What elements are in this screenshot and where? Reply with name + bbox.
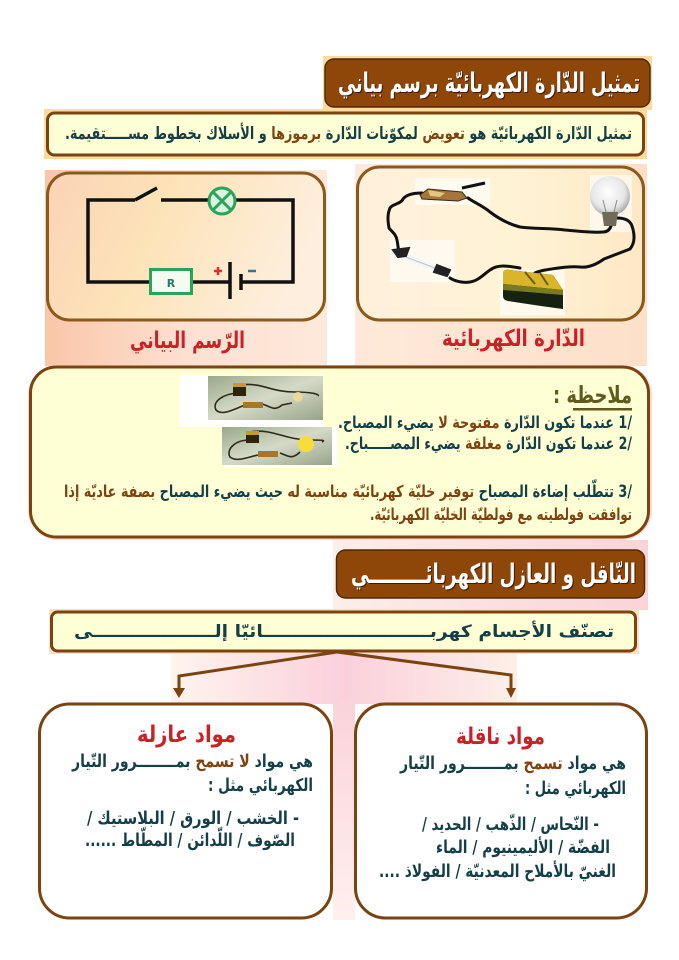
icon: resistor symbol: R bbox=[167, 277, 176, 290]
note lines: /1 عندما تكون الدّارة مفتوحة لا يضيء المصباح. bbox=[338, 413, 633, 433]
note lines: /2 عندما تكون الدّارة مغلقة يضيء المصـــــباح. bbox=[345, 434, 633, 454]
conductors text: الكهربائي مثل : bbox=[525, 779, 626, 799]
circuit wires photo bbox=[388, 193, 634, 282]
conductors text bbox=[379, 754, 626, 882]
panel: insulators bbox=[40, 704, 332, 918]
icon: lamp symbol bbox=[209, 188, 235, 214]
panel: schematic diagram bbox=[45, 170, 327, 366]
white image patches bbox=[390, 175, 632, 315]
icon: battery bbox=[503, 270, 563, 309]
heading: conductors: مواد ناقلة bbox=[456, 724, 545, 750]
thumbnails bbox=[180, 375, 337, 468]
insulators text: - الخشب / الورق / البلاستيك / bbox=[87, 809, 299, 829]
thumbnail: open circuit bbox=[208, 376, 323, 420]
insulators text: هي مواد لا تسمح بمــــــــرور التّيار bbox=[71, 752, 313, 772]
conductors text: الفضّة / الأليمينيوم / الماء bbox=[436, 836, 610, 858]
note heading: ملاحظة : bbox=[553, 381, 632, 409]
caption: real circuit: الدّارة الكهربائية bbox=[442, 326, 585, 352]
conductors text: - النّحاس / الذّهب / الحديد / bbox=[422, 814, 599, 835]
insulators text: الكهربائي مثل : bbox=[208, 776, 313, 796]
definition bar bbox=[44, 109, 647, 159]
arrow: to conductors bbox=[337, 652, 516, 698]
classification bar: تصنّف الأجسام كهربــــــــــــــــــــــــــائيّا إلـــــــــــــــــــى bbox=[74, 621, 614, 642]
arrow: to insulators bbox=[173, 652, 337, 698]
conductors text: هي مواد تسمح بمــــــــرور التّيار bbox=[399, 754, 626, 774]
note lines bbox=[64, 413, 633, 525]
conductors text: الغنيّ بالأملاح المعدنيّة / الفولاذ .... bbox=[379, 860, 616, 882]
insulators text: الصّوف / اللّدائن / المطّاط ...... bbox=[85, 827, 295, 851]
section two title bbox=[336, 550, 644, 598]
thumbnail: closed circuit bbox=[222, 427, 332, 465]
icon: crocodile clip bbox=[420, 183, 485, 201]
bottom background bbox=[333, 700, 355, 920]
panel: note bbox=[28, 365, 652, 540]
classification bar bbox=[49, 609, 639, 654]
icon: light bulb bbox=[590, 176, 630, 226]
insulators text bbox=[71, 752, 313, 851]
caption: schematic: الرّسم البياني bbox=[130, 328, 245, 354]
heading: insulators: مواد عازلة bbox=[137, 722, 236, 748]
section two background bbox=[333, 540, 648, 610]
definition bar: تمثيل الدّارة الكهربائيّة هو تعويض لمكوّنات الدّارة برموزها و الأسلاك بخطوط مســـــتقيمة. bbox=[65, 123, 632, 144]
panel: conductors bbox=[356, 704, 646, 918]
circuit wires bbox=[88, 188, 293, 282]
icon: fuse bbox=[393, 248, 450, 276]
note lines: /3 تتطّلب إضاءة المصباح توفير خليّة كهربائيّة مناسبة له حيث يضيء المصباح بصفة عاديّة إذا bbox=[64, 478, 633, 502]
arrows background bbox=[171, 652, 517, 704]
icon: resistor symbol bbox=[150, 270, 192, 294]
section one title bbox=[323, 56, 652, 110]
icon: battery symbol bbox=[214, 262, 256, 299]
panel: real circuit bbox=[355, 164, 647, 366]
